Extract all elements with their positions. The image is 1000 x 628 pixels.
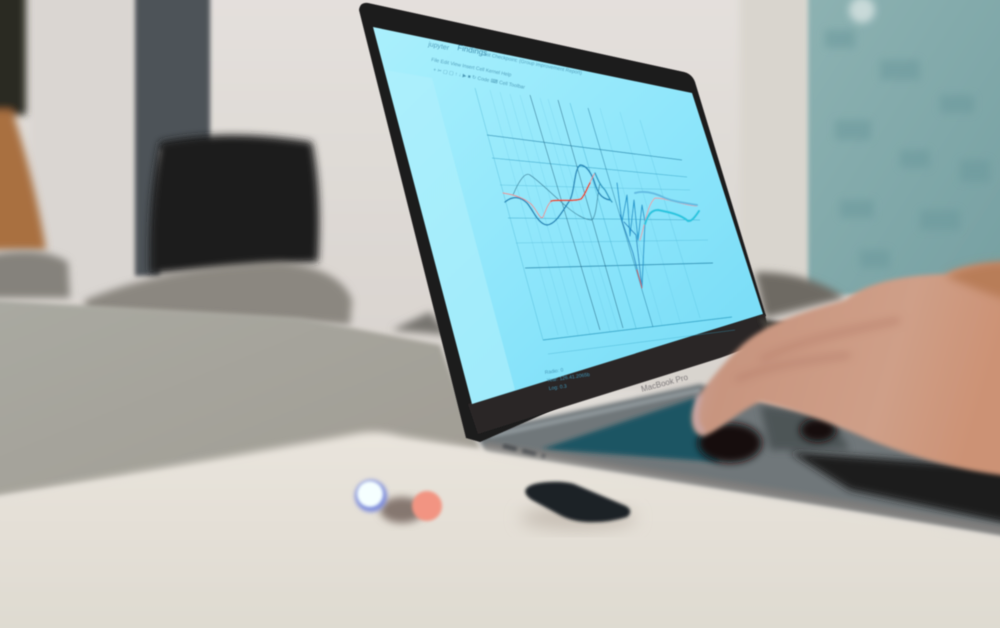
phone shadow <box>520 506 636 530</box>
background chair behind the screen edge <box>759 318 800 340</box>
background wall <box>0 0 1000 390</box>
black phone <box>525 482 630 522</box>
laptop screen <box>373 27 763 404</box>
blue-white light <box>355 480 387 512</box>
dark shapes under the fingers <box>698 418 836 463</box>
side panel of notebook <box>385 70 515 404</box>
chart notes text: Year: 126.41.2065b <box>546 372 591 384</box>
screen header text: + ✂ ▢ ▢ ↑ ↓ ▶ ■ ↻ Code ⌨ Cell Toolbar <box>433 67 526 91</box>
top strip of the base <box>490 390 700 436</box>
chart curves <box>503 165 699 288</box>
keys at the right of the finger <box>760 405 850 450</box>
hinge band <box>468 314 770 434</box>
red light <box>412 491 442 521</box>
side ports <box>503 446 545 457</box>
reflection smudge on cloth <box>380 497 424 523</box>
chart notes text: Radio: 0 <box>544 367 564 376</box>
grey table <box>0 300 480 498</box>
blurred chairs <box>0 251 845 335</box>
screen header text: File Edit View Insert Cell Kernel Help <box>431 57 512 79</box>
keyboard area <box>542 398 720 462</box>
MacBook Pro label: MacBook Pro <box>640 373 689 394</box>
hand <box>692 262 1000 476</box>
laptop base and keyboard <box>478 384 1000 536</box>
chart notes text: Log: 0.3 <box>548 383 567 392</box>
front edge highlight <box>485 446 1000 532</box>
laptop base <box>478 384 1000 536</box>
glass panel <box>808 0 1000 295</box>
chart grid <box>475 88 735 354</box>
screen header text: Findings <box>457 43 488 58</box>
dark door strip and orange object at left <box>0 0 46 250</box>
dark shadow under hand <box>790 452 1000 524</box>
foreground tablecloth <box>0 432 1000 628</box>
black suitcase <box>150 135 319 274</box>
chart notes text <box>544 367 591 392</box>
laptop lid <box>359 3 766 442</box>
dark pillar <box>135 0 210 276</box>
screen header text: Last Checkpoint: (Group improvement Report) <box>481 51 583 77</box>
screen header text <box>427 41 583 91</box>
screen header text: jupyter <box>427 41 450 52</box>
